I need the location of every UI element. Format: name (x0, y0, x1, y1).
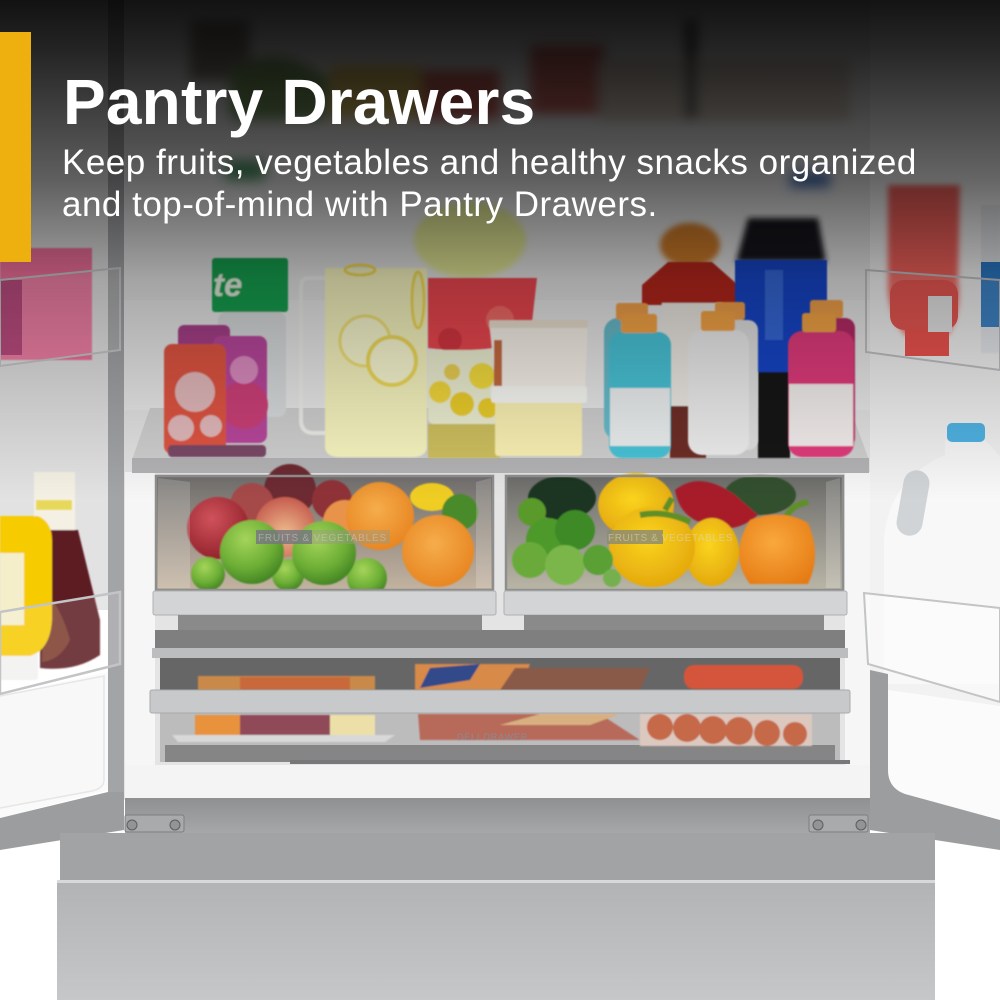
top dark overlay (0, 0, 1000, 500)
right door lower steel frame (870, 670, 1000, 850)
juice bottle (642, 262, 738, 458)
upper right drawer: vegetables (504, 473, 847, 630)
blue soda bottle (735, 218, 827, 458)
left hinge (125, 815, 184, 832)
blurred upper shelf contents (35, 20, 870, 210)
right hinge (809, 815, 868, 832)
left door condiments (0, 472, 100, 680)
description: and top-of-mind with Pantry Drawers. (62, 185, 658, 224)
deli containers (489, 320, 588, 456)
left door lower panel (0, 672, 108, 818)
fridge interior back wall (108, 0, 888, 800)
milk jug (884, 423, 1000, 684)
green bottle: te (213, 266, 242, 303)
freezer drawer (57, 833, 935, 1000)
soda cans (164, 325, 268, 457)
left door top bin (0, 248, 120, 366)
glass shelf (132, 408, 869, 473)
lower meat drawer (150, 630, 850, 764)
right door lower panel (888, 690, 1000, 820)
right door mid bin (864, 593, 1000, 702)
drawer label: FRUITS & VEGETABLES (608, 533, 733, 544)
green bottle (212, 258, 288, 417)
fruit containers (428, 278, 537, 458)
fridge lower frame (125, 765, 870, 833)
description: Keep fruits, vegetables and healthy snacks organized (62, 143, 917, 182)
sports drink bottles (604, 300, 855, 458)
yellow accent bar (0, 32, 31, 262)
drawer label: DELI DRAWER (457, 732, 528, 742)
juice bottle cap (660, 223, 720, 267)
description (62, 143, 917, 224)
drawer label: FRUITS & VEGETABLES (258, 533, 387, 544)
melon on top of fruit containers (414, 202, 526, 278)
title: Pantry Drawers (63, 66, 535, 138)
left door mid bin (0, 592, 120, 694)
upper left drawer: fruits (153, 464, 496, 630)
lemonade pitcher (301, 265, 427, 457)
right door top bin (866, 185, 1000, 370)
left door (0, 0, 124, 850)
right door (864, 0, 1000, 850)
